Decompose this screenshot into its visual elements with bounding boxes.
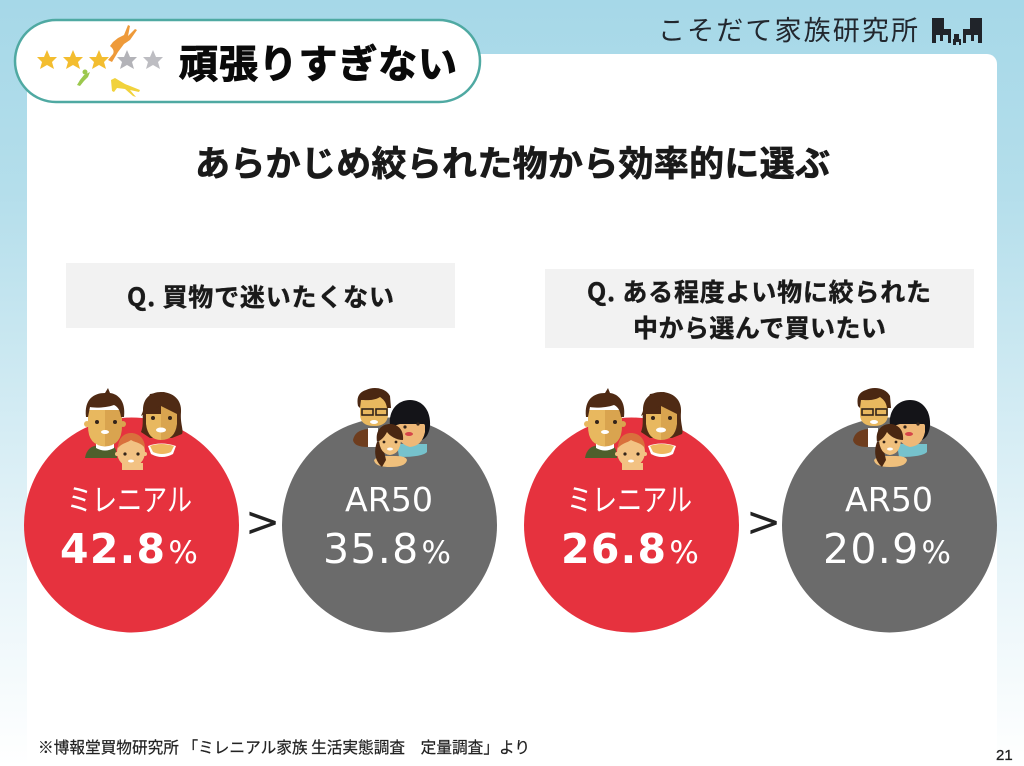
value: 35.8% — [323, 525, 452, 573]
label: AR50 — [845, 480, 933, 519]
heading: あらかじめ絞られた物から効率的に選ぶ — [195, 136, 830, 187]
label: AR50 — [345, 480, 433, 519]
comparison 1: AR50 — [282, 388, 497, 632]
label: ミレニアル — [567, 475, 692, 520]
icon: rating stars and figures — [37, 25, 163, 97]
icon: millennial family — [84, 388, 183, 470]
panel: question 1: Q. 買物で迷いたくない — [127, 278, 394, 314]
value: 26.8% — [561, 525, 700, 573]
panel: question 1 — [66, 263, 455, 328]
value: 20.9% — [823, 525, 952, 573]
title text: 頑張りすぎない — [179, 34, 457, 90]
icon: millennial family — [584, 388, 683, 470]
source note: ※博報堂買物研究所 「ミレニアル家族 生活実態調査 定量調査」より — [38, 734, 530, 758]
icon: chairs — [932, 18, 982, 45]
arrow: greater than 2: > — [746, 497, 781, 546]
panel: question 2: 中から選んで買いたい — [633, 309, 886, 345]
panel: question 2 — [545, 269, 974, 348]
arrow: greater than 1: > — [245, 497, 280, 546]
icon: AR50 family — [353, 388, 430, 467]
comparison 1: millennial — [24, 388, 239, 632]
label: ミレニアル — [67, 475, 192, 520]
comparison 2: millennial — [524, 388, 739, 632]
panel: question 2: Q. ある程度よい物に絞られた — [587, 273, 931, 309]
icon: AR50 family — [853, 388, 930, 467]
value: 42.8% — [60, 525, 199, 573]
logo: kodomo family lab: こそだて家族研究所 — [658, 9, 918, 48]
page number: 21 — [996, 747, 1013, 764]
title badge — [15, 20, 480, 102]
comparison 2: AR50 — [782, 388, 997, 632]
